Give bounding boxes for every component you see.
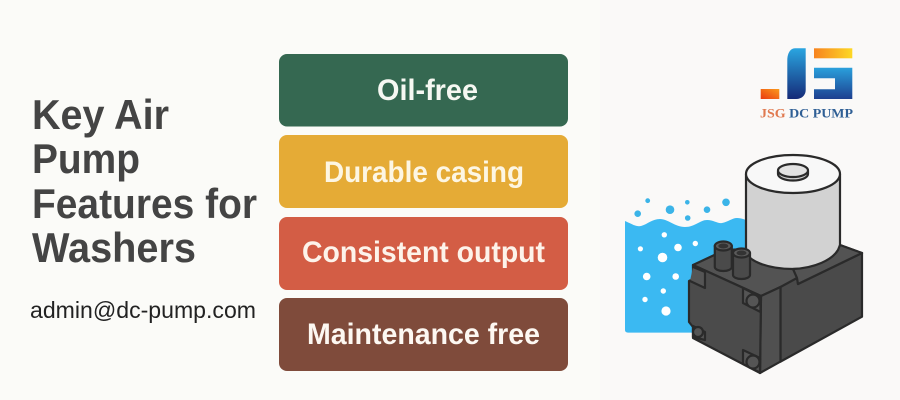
pump body top (693, 245, 862, 296)
feature: oil-free (279, 54, 568, 126)
feature: durable casing (279, 135, 568, 208)
title: Pump (32, 135, 140, 182)
feature: consistent output: Consistent output (302, 236, 545, 269)
feature: oil-free: Oil-free (377, 74, 478, 107)
title (32, 91, 257, 271)
droplets above water (634, 198, 730, 221)
feature: maintenance free (279, 298, 568, 371)
illustration: air pump (689, 155, 862, 373)
outlet ports (715, 242, 750, 279)
contact email: admin@dc-pump.com (30, 297, 256, 323)
pump body side strip (760, 287, 780, 373)
shoulder step (793, 245, 862, 284)
title: Key Air (32, 91, 169, 138)
logo: JSG DC PUMP (760, 48, 853, 120)
corner screws (690, 267, 760, 372)
pump body front face (689, 265, 761, 373)
logo: JSG DC PUMP: JSG DC PUMP (760, 106, 853, 120)
feature: consistent output (279, 217, 568, 290)
feature list (279, 54, 568, 371)
feature: maintenance free: Maintenance free (307, 318, 540, 351)
title: Features for (32, 180, 257, 227)
feature: durable casing: Durable casing (324, 156, 524, 189)
bubbles in water (638, 232, 698, 316)
illustration: water with bubbles (625, 198, 750, 333)
pump body right face (780, 253, 862, 362)
title: Washers (32, 224, 196, 271)
motor cylinder (746, 155, 840, 269)
